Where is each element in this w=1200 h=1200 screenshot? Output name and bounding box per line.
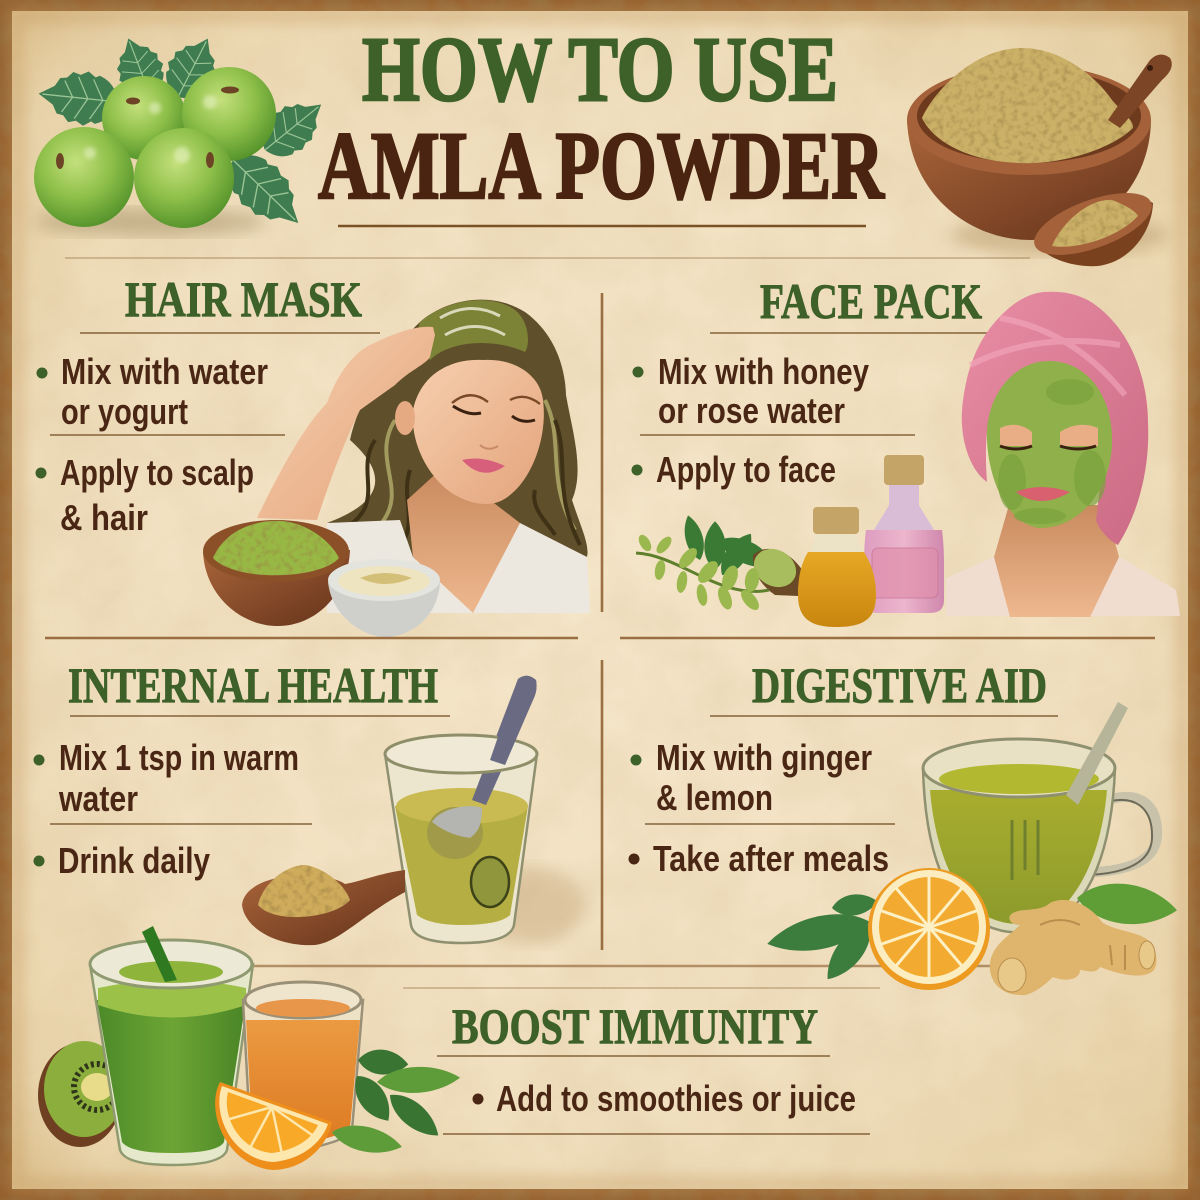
- title: AMLA POWDER: [318, 112, 885, 219]
- icon: wooden bowl of green paste: [203, 520, 350, 626]
- heading: DIGESTIVE AID: [752, 657, 1047, 713]
- icon: green smoothie glass with straw: [90, 926, 253, 1165]
- text block: hair mask steps: or yogurt: [61, 391, 188, 432]
- heading: BOOST IMMUNITY: [452, 998, 818, 1054]
- text block: internal health steps: Drink daily: [58, 840, 210, 881]
- text block: face pack steps: [632, 351, 915, 490]
- panel: hair mask: [36, 271, 590, 637]
- heading: HAIR MASK: [125, 271, 362, 327]
- text block: digestive aid steps: Take after meals: [653, 838, 889, 879]
- icon: woman with face mask and towel: [946, 292, 1180, 617]
- title: HOW TO USE: [362, 18, 838, 120]
- panel: digestive aid: [628, 657, 1179, 995]
- title: [318, 18, 885, 226]
- text block: hair mask steps: Apply to scalp: [60, 452, 254, 493]
- icon: leaves, lemon and ginger: [764, 868, 1179, 995]
- icon: cup of green tea with spoon: [923, 702, 1157, 932]
- icon: woman applying hair mask: [257, 300, 590, 613]
- panel: internal health: [34, 657, 585, 945]
- text block: boost immunity step: [443, 1078, 870, 1134]
- text block: hair mask steps: [36, 351, 285, 538]
- text block: digestive aid steps: Mix with ginger: [656, 737, 872, 778]
- panel: face pack: [632, 273, 1180, 627]
- text block: internal health steps: water: [58, 778, 138, 819]
- icon: white bowl of yogurt: [328, 559, 440, 637]
- icon: green leaves: [329, 1048, 461, 1159]
- panel: boost immunity: [38, 926, 870, 1170]
- text block: face pack steps: Mix with honey: [658, 351, 869, 392]
- icon: amla fruits and leaves: [34, 27, 336, 242]
- icon: herb sprig and leaves: [636, 513, 805, 613]
- text block: internal health steps: Mix 1 tsp in warm: [59, 737, 299, 778]
- decorative rule under title: [65, 257, 1030, 259]
- text block: digestive aid steps: [628, 737, 895, 879]
- heading: FACE PACK: [760, 273, 982, 329]
- text block: hair mask steps: Mix with water: [61, 351, 268, 392]
- text block: face pack steps: or rose water: [658, 390, 845, 431]
- icon: wooden spoon of powder: [242, 865, 405, 945]
- icon: bowl of amla powder with spoon: [907, 48, 1172, 268]
- icon: honey jar: [798, 507, 876, 627]
- icon: orange wedge: [215, 1082, 332, 1170]
- text block: face pack steps: Apply to face: [656, 449, 836, 490]
- icon: kiwi slice: [38, 1041, 124, 1147]
- icon: orange juice glass: [243, 982, 363, 1150]
- heading: INTERNAL HEALTH: [68, 657, 438, 713]
- text block: internal health steps: [34, 737, 312, 881]
- divider lines: [45, 293, 1155, 988]
- text block: digestive aid steps: & lemon: [656, 777, 773, 818]
- text block: boost immunity step: Add to smoothies or juice: [496, 1078, 856, 1119]
- text block: hair mask steps: & hair: [60, 497, 148, 538]
- icon: glass of amla water with spoon: [385, 676, 585, 943]
- icon: rose water bottle: [864, 455, 944, 613]
